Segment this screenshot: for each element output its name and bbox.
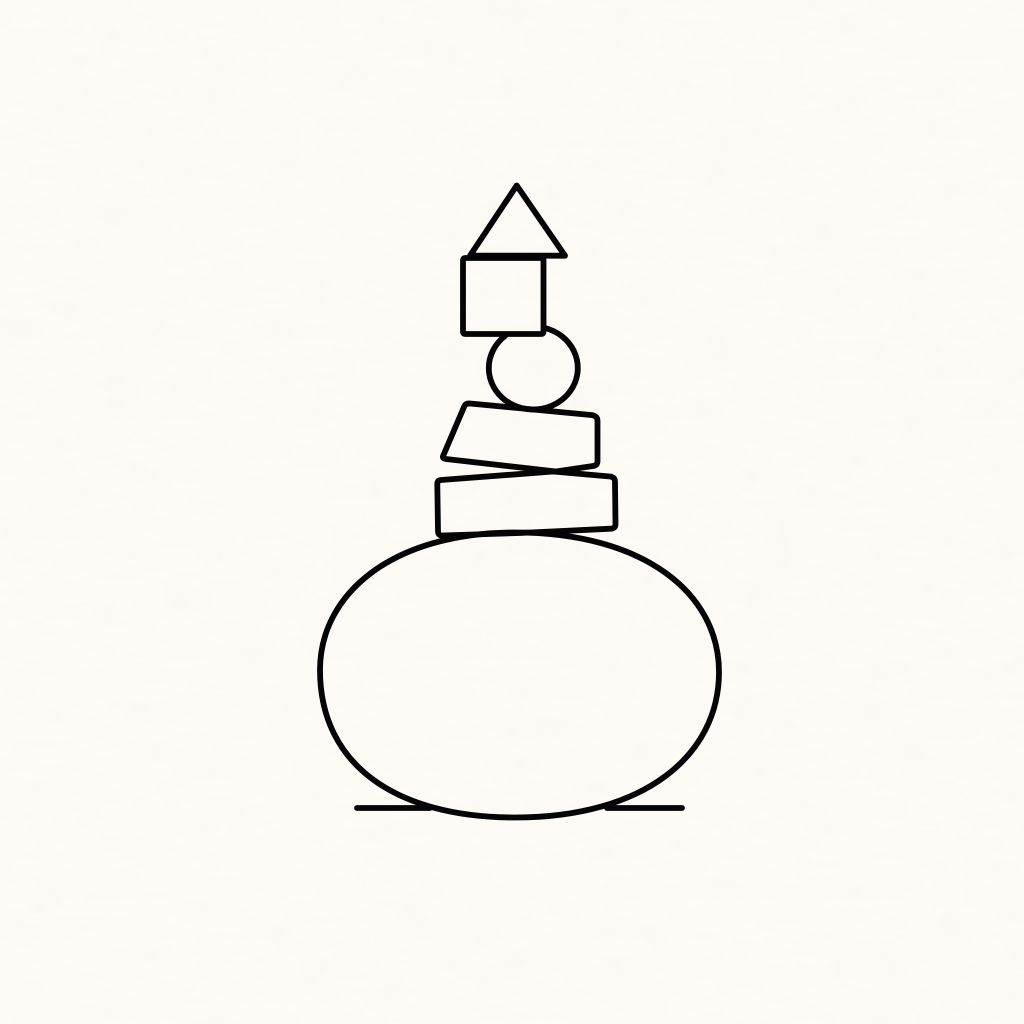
upper tilted stone: [443, 403, 598, 472]
lower flat stone: [437, 472, 616, 536]
ground line: [357, 805, 682, 811]
large base stone: [320, 532, 719, 818]
square: [463, 258, 544, 334]
triangle: [470, 186, 565, 256]
circle: [489, 328, 578, 410]
